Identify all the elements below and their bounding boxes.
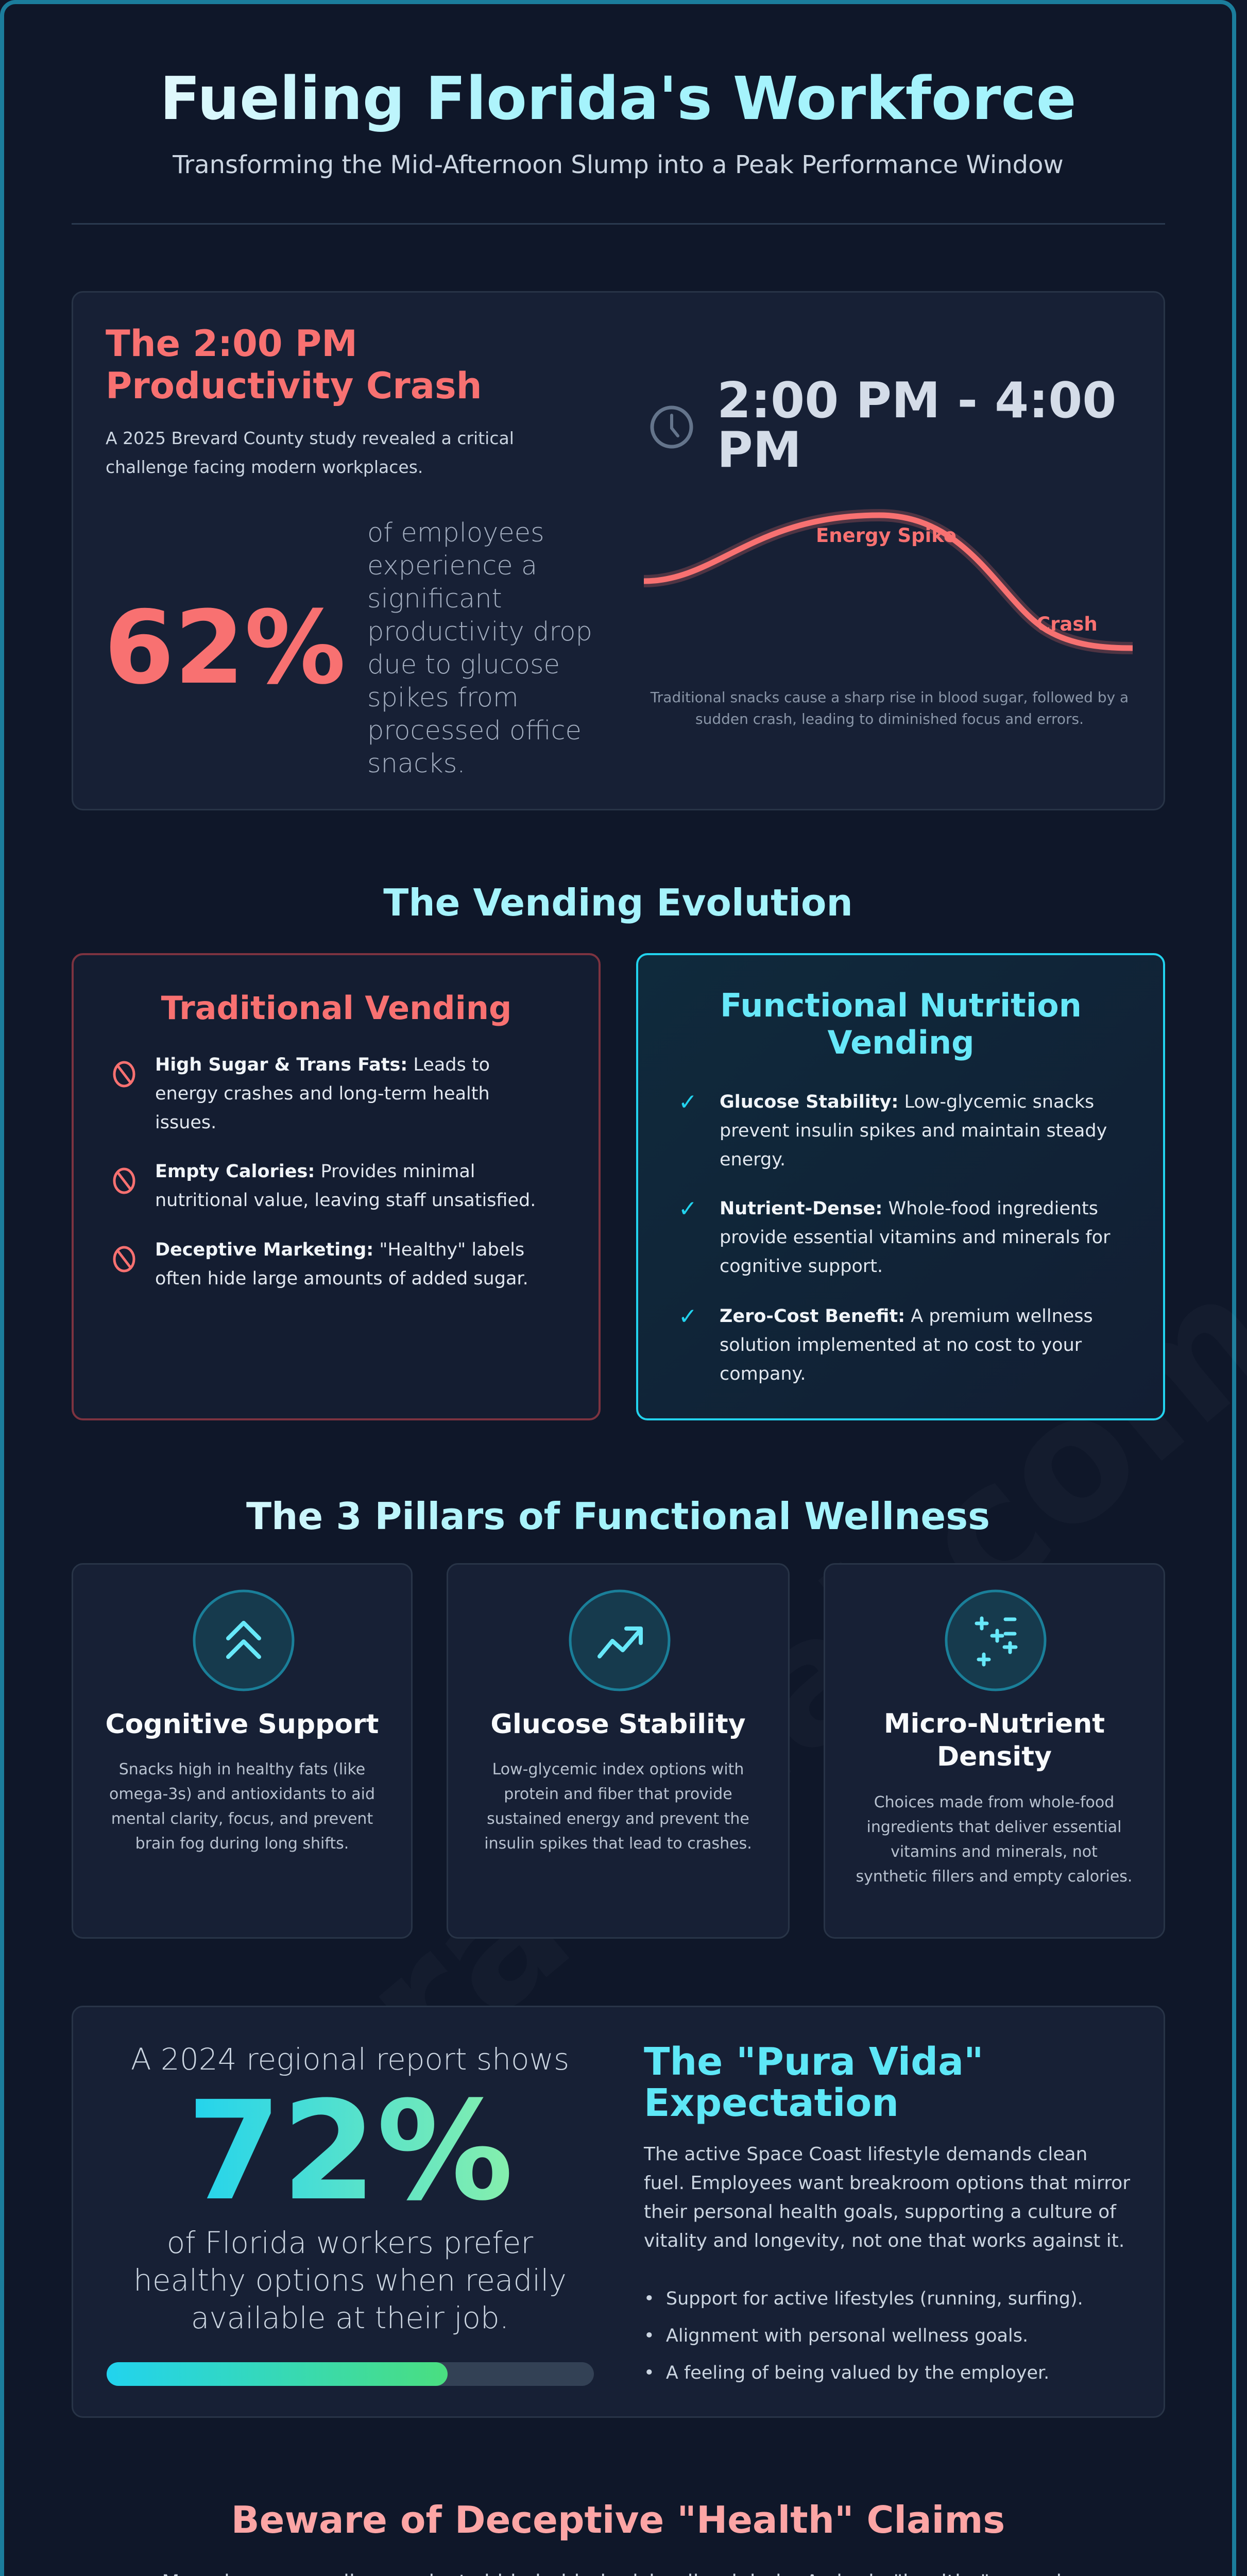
text: pura vida body: The active Space Coast lifestyle demands clean	[644, 2144, 1087, 2165]
text: glucose: Low-glycemic index options with protein and fiber that provide sustained energy and prevent the insulin spikes that lead to crashes.	[484, 1760, 752, 1853]
list: expectations	[644, 2289, 1083, 2383]
title: micro-nutrient: Density	[937, 1741, 1052, 1772]
icon: chevrons up	[193, 1590, 295, 1691]
heading: three pillars: The 3 Pillars of Functional Wellness	[246, 1495, 990, 1538]
text: stat description	[133, 2225, 567, 2335]
heading: pura vida: The "Pura Vida"	[644, 2040, 984, 2084]
heading: crash: Productivity Crash	[106, 365, 482, 407]
time range: 2:00 PM - 4:00 PM	[717, 372, 1116, 479]
panel: productivity crash	[72, 291, 1165, 810]
text: stat description: healthy options when readily	[133, 2263, 567, 2298]
title: Fueling Florida's Workforce	[160, 64, 1077, 133]
heading: pura vida: Expectation	[644, 2081, 899, 2125]
title: cognitive: Cognitive Support	[105, 1709, 379, 1740]
text: stat description: of Florida workers prefer	[167, 2225, 533, 2260]
heading: functional: Vending	[828, 1024, 974, 1061]
list: traditional issues	[113, 1055, 536, 1289]
caption: chart: Traditional snacks cause a sharp rise in blood sugar, followed by a sudden crash, leading to diminished focus and errors.	[651, 689, 1129, 727]
text: report intro: A 2024 regional report shows	[131, 2042, 569, 2077]
stat: 72%: 72%	[186, 2072, 514, 2231]
list: functional benefits: ✓	[678, 1089, 697, 1115]
icon: trend up	[569, 1590, 671, 1691]
heading: pura vida	[644, 2040, 984, 2125]
list: traditional issues: Empty Calories: Provides minimal nutritional value, leaving staff unsatisfied.	[155, 1161, 536, 1211]
list: traditional issues: High Sugar & Trans Fats: Leads to energy crashes and long-term health issues.	[155, 1055, 490, 1133]
icon: plus minus	[945, 1590, 1047, 1691]
title: micro-nutrient: Micro-Nutrient	[884, 1708, 1105, 1739]
subtitle: Transforming the Mid-Afternoon Slump into a Peak Performance Window	[173, 150, 1064, 179]
text: study intro: challenge facing modern workplaces.	[106, 457, 423, 477]
progress bar	[107, 2362, 594, 2386]
chart: energy curve	[644, 509, 1133, 654]
chart: energy curve: Crash	[1036, 613, 1098, 635]
heading: crash: The 2:00 PM	[106, 323, 357, 365]
card: cognitive support	[72, 1563, 413, 1939]
text: stat description: of employees experience a significant productivity drop due to glucose spikes from processed office snacks.	[367, 518, 592, 779]
title: glucose: Glucose Stability	[490, 1709, 746, 1740]
heading: crash	[106, 323, 482, 407]
list: functional benefits: Zero-Cost Benefit: A premium wellness solution implemented at no cost to your company.	[720, 1306, 1093, 1384]
stat: 62%: 62%	[104, 589, 346, 707]
panel: traditional vending	[72, 953, 601, 1420]
text: cognitive: Snacks high in healthy fats (like omega-3s) and antioxidants to aid mental clarity, focus, and prevent brain fog during long shifts.	[109, 1760, 375, 1853]
list: traditional issues: Deceptive Marketing: "Healthy" labels often hide large amounts of added sugar.	[155, 1240, 528, 1289]
heading: traditional: Traditional Vending	[161, 989, 511, 1027]
title: micro-nutrient	[884, 1708, 1105, 1772]
text: pura vida body: fuel. Employees want breakroom options that mirror their personal health goals, supporting a culture of vitality and longevity, not one that works against it.	[644, 2173, 1130, 2251]
text: stat description: available at their job.	[191, 2300, 509, 2335]
list: functional benefits: Glucose Stability: Low-glycemic snacks prevent insulin spikes and maintain steady energy.	[720, 1092, 1107, 1170]
text: micro-nutrient: Choices made from whole-food ingredients that deliver essential vitamins and minerals, not synthetic fillers and empty calories.	[856, 1793, 1132, 1886]
list: expectations: • Alignment with personal wellness goals.	[644, 2326, 1028, 2346]
card: glucose stability	[447, 1563, 790, 1939]
list: expectations: • A feeling of being valued by the employer.	[644, 2363, 1049, 2383]
list: functional benefits: ✓	[678, 1196, 697, 1222]
chart: energy curve: Energy Spike	[816, 524, 956, 547]
text: study intro	[106, 428, 514, 477]
panel: pura vida	[72, 2006, 1165, 2418]
heading: functional: Functional Nutrition	[720, 987, 1082, 1024]
list: expectations: • Support for active lifestyles (running, surfing).	[644, 2289, 1083, 2309]
list: functional benefits: Nutrient-Dense: Whole-food ingredients provide essential vitamins and minerals for cognitive support.	[720, 1198, 1111, 1277]
heading: deceptive claims: Beware of Deceptive "Health" Claims	[231, 2498, 1005, 2541]
panel: functional nutrition vending	[636, 953, 1165, 1420]
list: functional benefits: ✓	[678, 1303, 697, 1330]
heading: three pillars	[0, 1495, 1236, 1537]
icon: clock	[650, 406, 693, 448]
heading: functional	[720, 987, 1082, 1061]
card: micro-nutrient density	[824, 1563, 1165, 1939]
heading: vending evolution: The Vending Evolution	[383, 881, 853, 924]
list: functional benefits	[678, 1089, 1111, 1384]
text: study intro: A 2025 Brevard County study revealed a critical	[106, 428, 514, 448]
